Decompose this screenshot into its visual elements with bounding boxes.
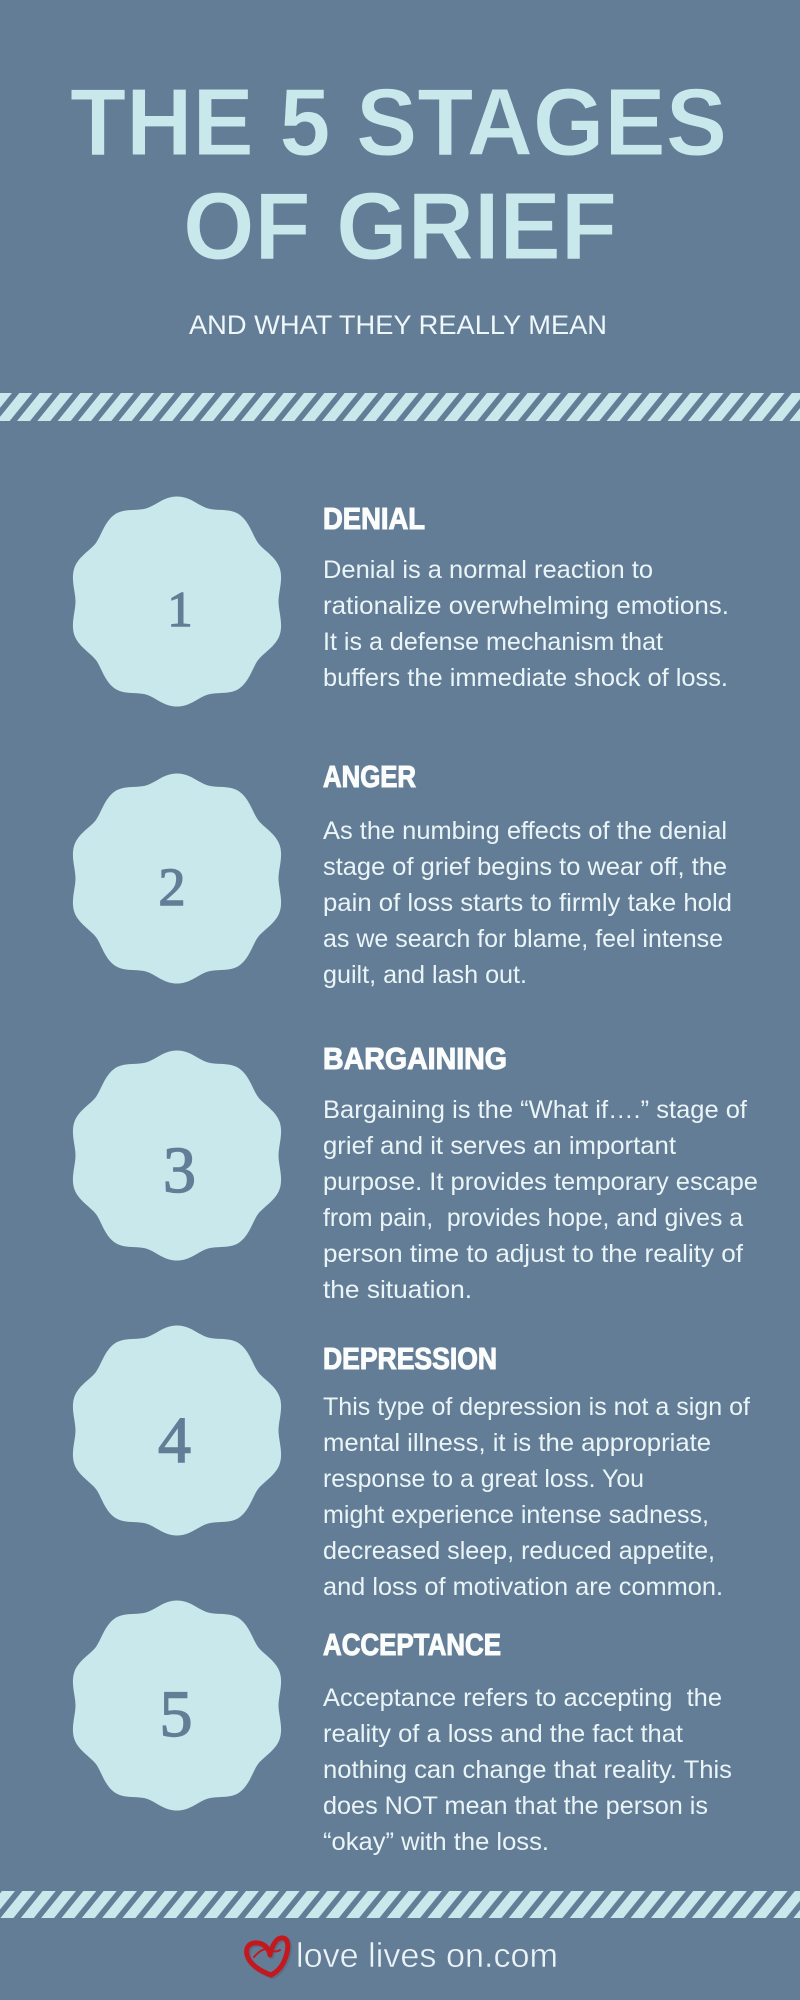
text: acceptance: nothing can change that reality. This xyxy=(323,1756,732,1784)
heading: bargaining: BARGAINING xyxy=(323,1041,507,1076)
text: acceptance: reality of a loss and the fact that xyxy=(323,1720,683,1748)
number 3: 3 xyxy=(163,1134,196,1207)
stage 4: depression xyxy=(73,1326,750,1601)
text: anger: as we search for blame, feel intense xyxy=(323,925,723,953)
text: bargaining: person time to adjust to the reality of xyxy=(323,1240,743,1268)
text: bargaining: grief and it serves an important xyxy=(323,1132,676,1160)
text: bargaining: Bargaining is the “What if….” stage of xyxy=(323,1096,747,1124)
number 1: 1 xyxy=(168,581,192,637)
text: denial: buffers the immediate shock of loss. xyxy=(323,664,728,692)
number 5: 5 xyxy=(160,1678,192,1751)
stage 3: bargaining xyxy=(73,1041,758,1304)
text: anger: stage of grief begins to wear off, the xyxy=(323,853,727,881)
text: bargaining: from pain, provides hope, and gives a xyxy=(323,1204,743,1232)
stage 1: denial xyxy=(73,496,729,706)
icon: red ribbon heart xyxy=(247,1938,289,1976)
badge 1 xyxy=(73,496,281,706)
text: depression: decreased sleep, reduced appetite, xyxy=(323,1537,715,1565)
text: denial: It is a defense mechanism that xyxy=(323,628,663,656)
text: acceptance: does NOT mean that the person is xyxy=(323,1792,708,1820)
logo wordmark: love lives on.com xyxy=(296,1937,558,1975)
text: anger: pain of loss starts to firmly take hold xyxy=(323,889,732,917)
text: denial xyxy=(323,556,729,692)
text: depression: and loss of motivation are common. xyxy=(323,1573,723,1601)
text: bargaining xyxy=(323,1096,758,1304)
text: anger xyxy=(323,817,732,989)
text: acceptance: “okay” with the loss. xyxy=(323,1828,549,1856)
title: THE 5 STAGES xyxy=(70,69,727,176)
badge 4 xyxy=(73,1326,281,1536)
badge 2 xyxy=(73,774,281,984)
stage 2: anger xyxy=(73,759,732,989)
text: acceptance: Acceptance refers to accepting the xyxy=(323,1684,722,1712)
number 2: 2 xyxy=(158,857,186,917)
badge 5 xyxy=(73,1600,281,1810)
footer logo xyxy=(247,1937,558,1976)
subtitle: AND WHAT THEY REALLY MEAN xyxy=(189,310,607,340)
heading: denial: DENIAL xyxy=(323,501,425,536)
text: depression: might experience intense sadness, xyxy=(323,1501,709,1529)
text: depression: This type of depression is not a sign of xyxy=(323,1393,750,1421)
text: depression: mental illness, it is the appropriate xyxy=(323,1429,711,1457)
heading: depression: DEPRESSION xyxy=(323,1341,497,1376)
text: denial: rationalize overwhelming emotions. xyxy=(323,592,729,620)
text: anger: guilt, and lash out. xyxy=(323,961,527,989)
title xyxy=(70,69,727,280)
text: bargaining: purpose. It provides temporary escape xyxy=(323,1168,758,1196)
title: OF GRIEF xyxy=(183,173,617,280)
text: bargaining: the situation. xyxy=(323,1276,472,1304)
text: depression xyxy=(323,1393,750,1601)
text: acceptance xyxy=(323,1684,732,1856)
text: depression: response to a great loss. You xyxy=(323,1465,644,1493)
text: denial: Denial is a normal reaction to xyxy=(323,556,653,584)
heading: anger: ANGER xyxy=(323,759,416,794)
number 4: 4 xyxy=(158,1404,191,1477)
stage 5: acceptance xyxy=(73,1600,732,1856)
text: anger: As the numbing effects of the denial xyxy=(323,817,727,845)
badge 3 xyxy=(73,1050,281,1260)
heading: acceptance: ACCEPTANCE xyxy=(323,1627,501,1662)
